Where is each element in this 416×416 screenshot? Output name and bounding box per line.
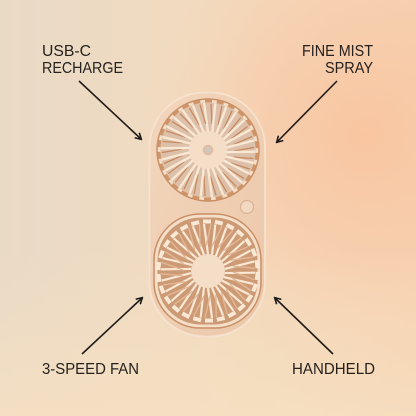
speed button — [240, 200, 254, 214]
arrow: 3-speed fan — [82, 298, 142, 354]
lower fan — [154, 214, 261, 328]
label: handheld: HANDHELD — [292, 361, 375, 378]
lower fan hub — [191, 254, 225, 288]
label: fine mist spray: SPRAY — [325, 60, 373, 77]
upper fan with mist nozzle — [157, 99, 259, 201]
arrow: USB-C recharge — [79, 81, 141, 139]
mist nozzle — [204, 146, 212, 154]
arrow: fine mist spray — [277, 81, 337, 142]
device body — [150, 92, 265, 336]
label: USB-C recharge: RECHARGE — [42, 60, 123, 77]
device: handheld fan — [150, 92, 265, 336]
label: USB-C recharge: USB-C — [42, 43, 91, 60]
label: fine mist spray: FINE MIST — [302, 43, 373, 60]
arrow: handheld — [275, 298, 333, 354]
label: 3-speed fan: 3-SPEED FAN — [42, 361, 139, 378]
